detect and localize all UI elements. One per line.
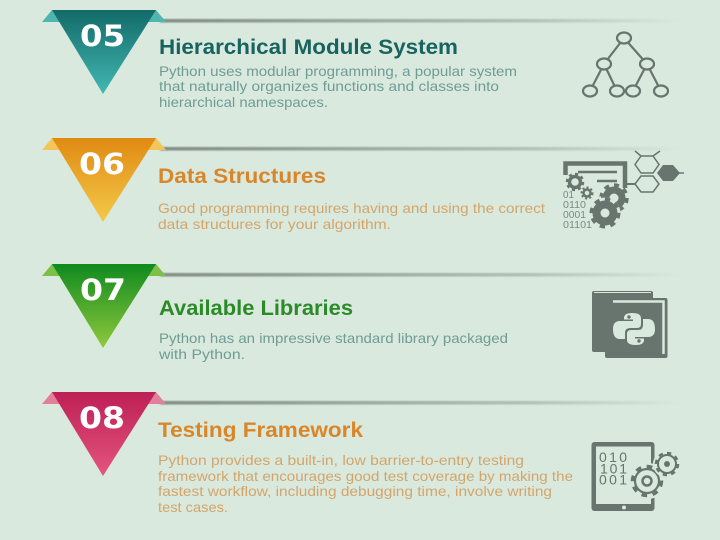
section 08: Testing Framework bbox=[42, 392, 681, 515]
ribbon wings 06 bbox=[42, 138, 166, 150]
description 08: test cases. bbox=[158, 499, 228, 515]
description 06: data structures for your algorithm. bbox=[158, 216, 391, 232]
heading 06: Data Structures bbox=[158, 164, 326, 188]
number 05: 05 bbox=[80, 19, 125, 53]
description 05 bbox=[159, 63, 517, 110]
section 05: Hierarchical Module System bbox=[42, 10, 680, 110]
description 05: Python uses modular programming, a popular system bbox=[159, 63, 517, 79]
heading 07: Available Libraries bbox=[159, 296, 353, 320]
header band 07 bbox=[160, 273, 680, 276]
description 07 bbox=[158, 330, 508, 362]
description 07: Python has an impressive standard library packaged bbox=[159, 330, 508, 346]
description 07: with Python. bbox=[158, 346, 245, 362]
icon: tablet with gears: 101 bbox=[600, 460, 627, 476]
heading 08: Testing Framework bbox=[158, 418, 363, 442]
icon: data structures: 01 bbox=[563, 190, 574, 201]
icon: data structures bbox=[563, 151, 684, 231]
triangle badge 06 bbox=[52, 138, 156, 222]
description 08: fastest workflow, including debugging time, involve writing bbox=[158, 483, 552, 499]
header band 05 bbox=[160, 19, 680, 22]
ribbon wings 08 bbox=[42, 392, 166, 404]
number 07: 07 bbox=[80, 273, 126, 307]
triangle badge 05 bbox=[52, 10, 156, 94]
icon: tablet with gears bbox=[592, 442, 681, 511]
description 08 bbox=[158, 452, 573, 515]
python logo bbox=[613, 313, 655, 345]
description 08: Python provides a built-in, low barrier-to-entry testing bbox=[158, 452, 524, 468]
header band 08 bbox=[160, 401, 680, 404]
number 08: 08 bbox=[79, 401, 125, 435]
description 05: hierarchical namespaces. bbox=[159, 94, 328, 110]
description 06 bbox=[158, 200, 545, 232]
description 08: framework that encourages good test coverage by making the bbox=[158, 468, 573, 484]
triangle badge 07 bbox=[52, 264, 156, 348]
icon: python books bbox=[592, 291, 668, 358]
icon: data structures: 0110 bbox=[563, 200, 586, 211]
ribbon wings 05 bbox=[42, 10, 166, 22]
number 06: 06 bbox=[79, 147, 125, 181]
icon: tablet with gears: 010 bbox=[599, 449, 627, 465]
icon: module tree bbox=[583, 32, 668, 96]
section 06: Data Structures bbox=[42, 138, 684, 232]
ribbon wings 07 bbox=[42, 264, 166, 276]
icon: data structures: 01101 bbox=[563, 220, 592, 231]
heading 05: Hierarchical Module System bbox=[159, 35, 458, 59]
description 06: Good programming requires having and using the correct bbox=[158, 200, 545, 216]
description 05: that naturally organizes functions and classes into bbox=[159, 78, 499, 94]
icon: data structures: 0001 bbox=[563, 210, 586, 221]
header band 06 bbox=[160, 147, 680, 150]
section 07: Available Libraries bbox=[42, 264, 680, 362]
triangle badge 08 bbox=[52, 392, 156, 476]
icon: tablet with gears: 001 bbox=[599, 472, 627, 488]
